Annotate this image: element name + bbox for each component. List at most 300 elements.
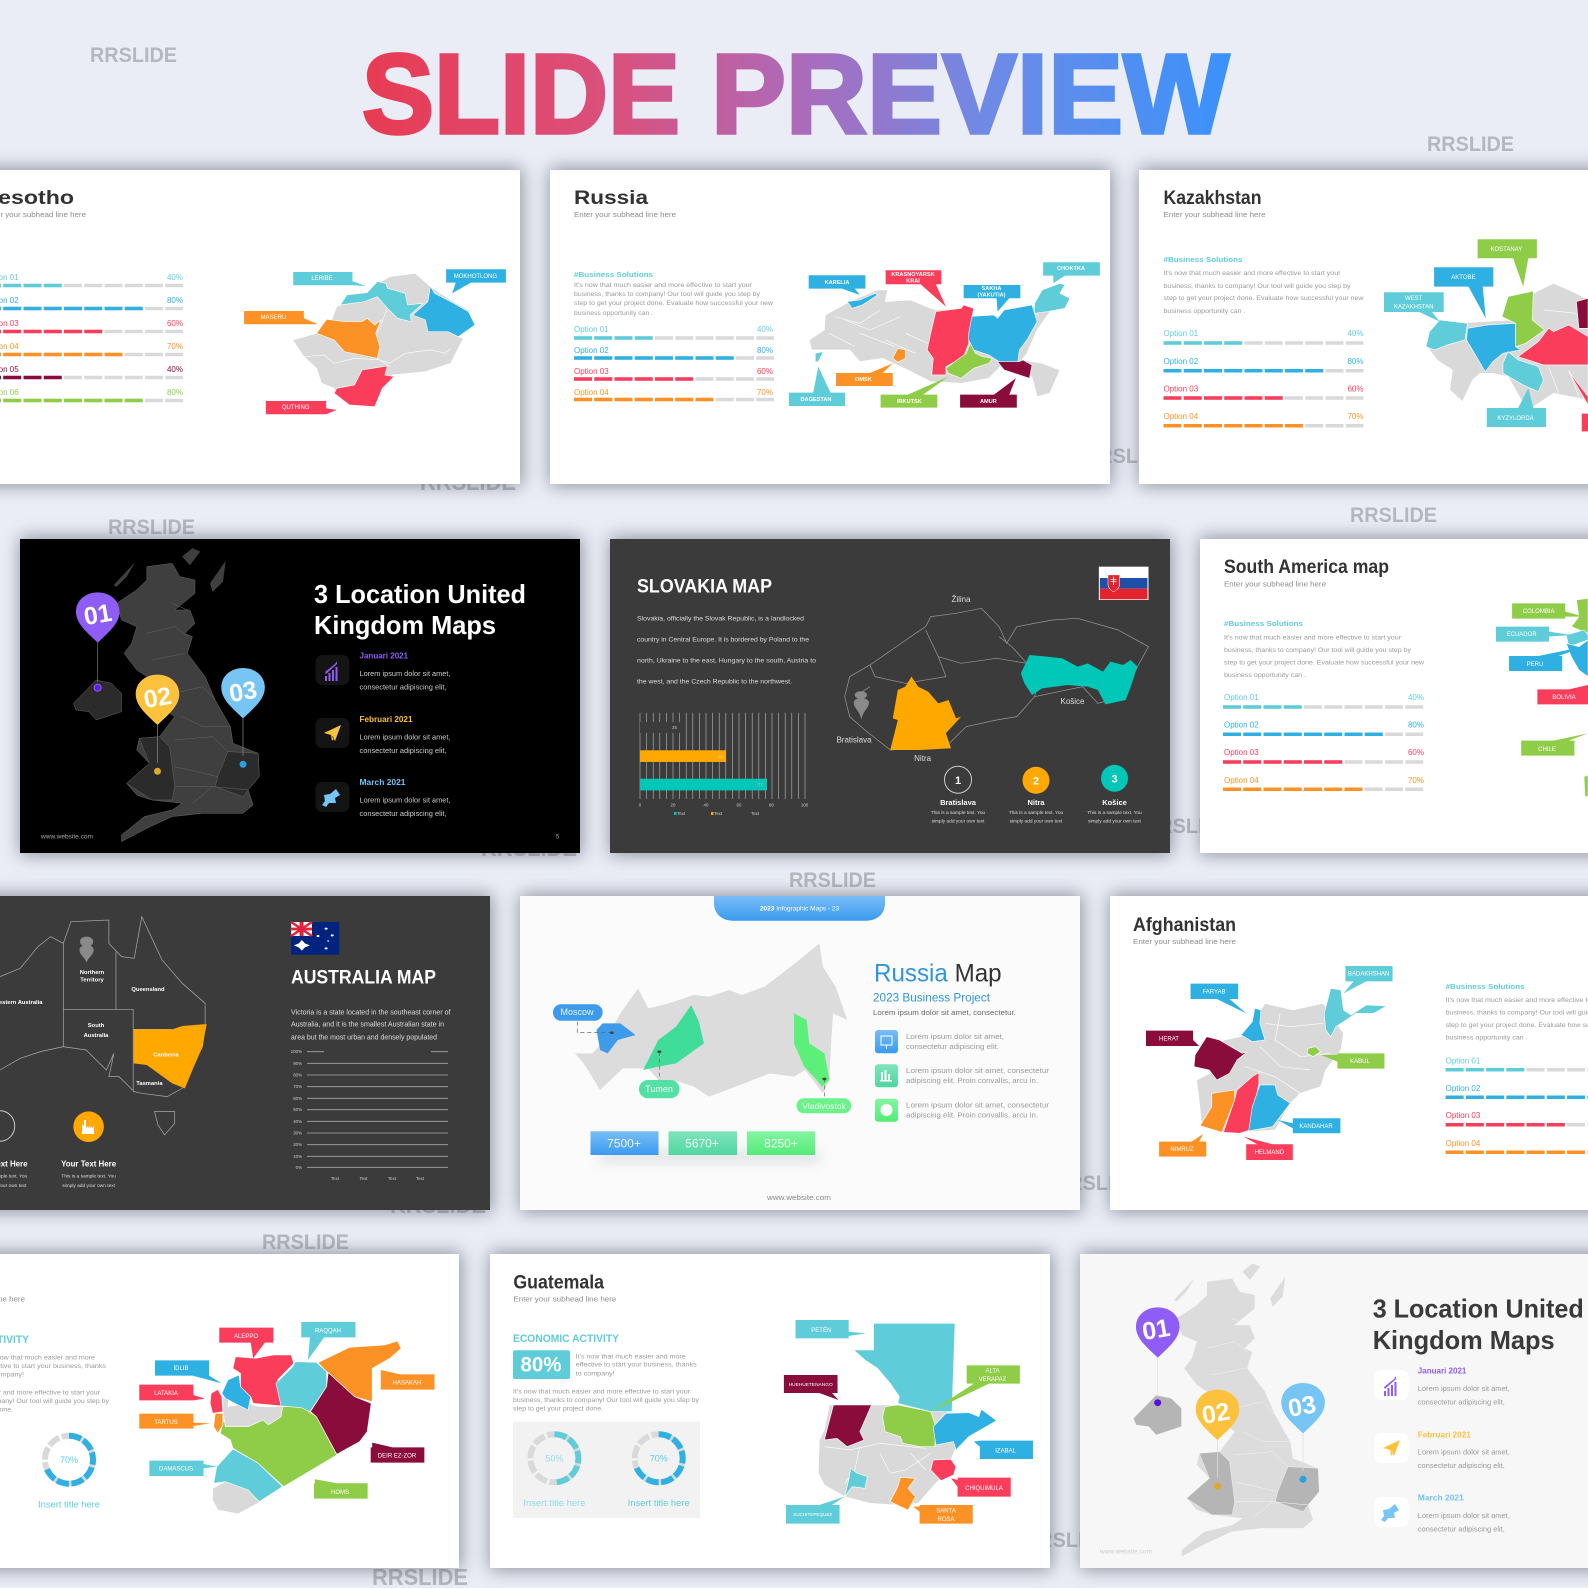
callout: Chiquimula: CHIQUIMULA	[965, 1486, 1003, 1492]
line chart grid: 30%	[293, 1130, 302, 1136]
footer URL: www.website.com	[1099, 1550, 1152, 1556]
callout: Aktobe: AKTOBE	[1451, 275, 1476, 281]
item: presentation: consectetur adipiscing elit.	[906, 1044, 999, 1051]
business solutions text: step to get your project done. Evaluate how successful your new	[574, 300, 773, 307]
business solutions text	[1224, 619, 1424, 679]
heading: Russia: Russia	[574, 188, 649, 209]
item: Februari 2021	[316, 715, 451, 755]
item: Februari 2021: consectetur adipiscing elit,	[1418, 1463, 1505, 1470]
panel: Russia slide	[550, 170, 1110, 484]
label: Vladivostok: Vladivostok	[802, 1101, 846, 1111]
callout: Peru	[1509, 647, 1584, 671]
item: pie: adipiscing elit. Proin convallis, arcu in.	[906, 1112, 1038, 1119]
item: Februari 2021: Lorem ipsum dolor sit amet,	[1418, 1449, 1510, 1456]
item: pie	[875, 1099, 1050, 1122]
progress rows	[574, 325, 774, 400]
region labels: Bratislava	[836, 736, 872, 745]
business solutions text: It's now that much easier and more effective to start your	[1224, 635, 1402, 642]
callout: Dagestan	[789, 367, 845, 406]
description: area but the most urban and densely populated	[291, 1034, 437, 1041]
heading: 3 Location United Kingdom Maps: 3 Location United	[314, 579, 526, 609]
panel: Slovakia slide	[610, 539, 1170, 853]
stat: Košice: Košice	[1102, 798, 1127, 807]
callout: Helmand	[1244, 1137, 1293, 1160]
region labels: Žilina	[951, 595, 971, 604]
text: RRSLIDE	[1144, 815, 1231, 838]
subhead: Enter your subhead line here	[574, 210, 676, 219]
label: Moscow: Moscow	[560, 1007, 594, 1017]
item: chart: Lorem ipsum dolor sit amet, consectetur	[906, 1068, 1050, 1075]
callout: Deir ez-Zor	[371, 1443, 424, 1463]
progress rows: Option 02	[1164, 357, 1199, 366]
callout: Kostanay	[1478, 239, 1537, 287]
state labels: Tasmania	[136, 1081, 163, 1087]
business solutions text: business, thanks to company! Our tool will guide you step by	[1164, 283, 1351, 290]
line chart grid: 100%	[291, 1049, 302, 1054]
progress rows: 40%	[1408, 693, 1424, 702]
bar chart: 40	[704, 803, 709, 808]
callout: Faryab	[1191, 984, 1246, 1013]
business solutions text: It's now that much easier and more effective to start your	[1164, 270, 1341, 277]
callout: Sakha	[964, 285, 1020, 312]
progress rows: Option 04	[1224, 776, 1259, 785]
item: presentation	[875, 1030, 1004, 1053]
stat: orange circle: simply add your own text	[62, 1183, 116, 1189]
description: Australia, and it is the smallest Australian state in	[291, 1022, 444, 1029]
heading: 3 Location United Kingdom Maps: Kingdom Maps	[1373, 1325, 1555, 1355]
callout: Tartus	[139, 1414, 210, 1429]
callout: Raqqah	[301, 1322, 355, 1360]
progress rows: 80%	[167, 388, 183, 397]
stat: Bratislava	[931, 766, 986, 825]
donut panel	[513, 1422, 700, 1518]
stat: Nitra: simply add your own text	[1010, 819, 1063, 825]
progress rows: 70%	[1347, 412, 1364, 421]
flag: Slovakia	[1099, 567, 1148, 600]
stat: Košice: 3	[1111, 774, 1118, 786]
progress rows: 60%	[1347, 384, 1364, 394]
progress rows	[1223, 693, 1424, 789]
progress rows: Option 04	[574, 388, 609, 397]
stat: Nitra: Nitra	[1027, 798, 1045, 807]
callout: Nimruz	[1159, 1134, 1206, 1157]
panel: Russia Map infographic slide	[520, 896, 1080, 1210]
callout: Idlib: IDLIB	[173, 1366, 189, 1372]
callout: Mokhotlong	[446, 269, 506, 293]
callout: Irkutsk	[881, 377, 948, 408]
paragraph text: business, thanks to company! Our tool will guide you step by	[513, 1397, 700, 1404]
progress rows: 40%	[167, 273, 183, 282]
line chart grid: 0%	[296, 1165, 302, 1170]
progress rows: Option 01	[1164, 329, 1199, 338]
heading: South America map: South America map	[1224, 557, 1389, 578]
item: presentation: Lorem ipsum dolor sit amet,	[906, 1034, 1004, 1041]
state labels: South	[88, 1023, 105, 1029]
progress rows: Option 01	[1446, 1056, 1481, 1065]
bar chart: 77	[758, 782, 763, 787]
callout: Leribe: LERIBE	[311, 276, 333, 282]
state labels: Australia	[84, 1033, 109, 1039]
footer URL: www.website.com	[40, 835, 93, 841]
business solutions text: business, thanks to company! Our tool will guide you step by	[574, 291, 761, 298]
label: Vladivostok	[796, 1098, 851, 1113]
description: the west, and the Czech Republic to the northwest.	[637, 678, 792, 685]
callout: Bolivia	[1537, 685, 1588, 704]
text: RRSLIDE	[390, 1192, 486, 1218]
map: Kazakhstan	[1426, 283, 1588, 432]
pin 02	[136, 675, 179, 775]
donut panel: Insert title here	[523, 1498, 585, 1508]
heading: 3 Location United Kingdom Maps: Kingdom Maps	[314, 610, 496, 640]
heading: Afghanistan: Afghanistan	[1133, 915, 1236, 936]
panel: light United Kingdom slide	[1080, 1254, 1588, 1568]
panel: dark United Kingdom slide	[20, 539, 580, 853]
stat: 5670+	[668, 1131, 737, 1155]
line chart grid: Text	[359, 1176, 368, 1181]
progress rows: Option 04	[1446, 1139, 1481, 1148]
callout: Alta Verapaz: VERAPAZ	[979, 1377, 1007, 1383]
callout: Suchitepequez	[786, 1497, 845, 1524]
progress rows: Option 04	[1164, 412, 1199, 421]
callout: Bolivia: BOLIVIA	[1552, 695, 1576, 701]
callout: Maseru	[244, 311, 318, 324]
description: Victoria is a state located in the southeast corner of	[291, 1009, 451, 1016]
callout: Kyzylorda	[1487, 388, 1546, 427]
title	[362, 31, 1229, 157]
map: United Kingdom dark	[73, 548, 259, 842]
callout: Peru: PERU	[1527, 662, 1543, 668]
callout: Krasnoyarsk Krai	[886, 270, 946, 307]
callout: Herat: HERAT	[1159, 1037, 1179, 1043]
stat: orange circle: This is a sample text. You	[61, 1174, 116, 1180]
map: Russia	[809, 283, 1080, 397]
progress rows: Option 02	[1446, 1084, 1481, 1093]
progress rows: 80%	[1408, 720, 1424, 730]
header tab	[714, 896, 885, 921]
stat: Nitra: 2	[1033, 776, 1039, 788]
line chart grid: 70%	[293, 1084, 302, 1089]
callout: Chile: CHILE	[1538, 747, 1556, 753]
subhead: Enter your subhead line here	[1164, 210, 1266, 219]
bar chart: 20	[671, 803, 676, 808]
flag: Australia	[291, 922, 339, 955]
item: chart: adipiscing elit. Proin convallis, arcu in.	[906, 1078, 1038, 1085]
paragraph text: to company!	[576, 1371, 615, 1378]
bar chart: 80	[769, 803, 774, 808]
map: Guatemala	[818, 1323, 997, 1510]
progress rows: Option 01	[574, 325, 609, 334]
panel: Guatemala slide	[490, 1254, 1050, 1568]
description: Slovakia, officially the Slovak Republic, is a landlocked	[637, 616, 804, 623]
callout: Suchitepequez: SUCHITEPEQUEZ	[793, 1512, 832, 1517]
pin 02: 02	[142, 682, 174, 714]
callout: Herat	[1146, 1031, 1199, 1046]
callout: Chiquimula	[951, 1478, 1011, 1497]
header tab: 2023 Infographic Maps - 23	[760, 906, 839, 913]
callout: Faryab: FARYAB	[1202, 990, 1226, 996]
panel: South America slide	[1200, 539, 1588, 853]
bar chart: Text	[751, 811, 760, 816]
callout: Quthing	[266, 401, 337, 414]
callout: Badakhshan	[1343, 966, 1393, 993]
callout: Deir ez-Zor: DEIR EZ-ZOR	[378, 1454, 417, 1460]
bar chart: 100	[801, 803, 809, 808]
item: March 2021	[316, 778, 451, 818]
business solutions text: It's now that much easier and more effective to start your	[574, 282, 753, 289]
callout: Kandahar: KANDAHAR	[1299, 1124, 1333, 1130]
item: Januari 2021: Januari 2021	[1418, 1367, 1467, 1376]
business solutions text: business opportunity can .	[1446, 1035, 1528, 1042]
map: Afghanistan	[1194, 988, 1386, 1133]
watermark: row 2 left: RRSLIDE	[108, 516, 195, 539]
description	[637, 616, 816, 685]
stat: Bratislava: simply add your own text	[932, 819, 985, 825]
bar chart: Text	[714, 811, 723, 816]
subhead: Enter your subhead line here	[513, 1295, 616, 1304]
callout: Santa Rosa: ROSA	[937, 1517, 955, 1523]
progress rows	[0, 273, 183, 400]
callout: Kyzylorda: KYZYLORDA	[1497, 416, 1534, 422]
progress rows: 70%	[1408, 776, 1424, 785]
callout: Ecuador: ECUADOR	[1507, 632, 1537, 638]
callout: Kabul: KABUL	[1350, 1059, 1370, 1065]
business solutions text: step to get your project done. Evaluate how successful your new	[1164, 295, 1364, 302]
business solutions text: #Business Solutions	[1224, 619, 1303, 628]
item: March 2021	[1374, 1494, 1510, 1534]
callout: Petén	[796, 1320, 866, 1338]
progress rows: Option 02	[1224, 720, 1259, 730]
line chart grid: Text	[331, 1176, 340, 1181]
callout: West Kazakhstan: WEST	[1405, 296, 1423, 302]
bar chart	[639, 713, 809, 816]
item: March 2021: consectetur adipiscing elit,	[360, 811, 447, 818]
stat: 7500+	[590, 1131, 658, 1155]
stat: orange circle: Your Text Here	[61, 1160, 117, 1169]
subhead: Enter your subhead line here	[1133, 937, 1236, 946]
pin 03: 03	[227, 676, 259, 708]
item: Januari 2021: Lorem ipsum dolor sit amet,	[360, 671, 451, 678]
panel: Australia slide	[0, 896, 490, 1210]
watermark: row 3 centre: RRSLIDE	[789, 869, 876, 892]
callout: Latakia	[139, 1385, 205, 1400]
panel: Kazakhstan slide	[1139, 170, 1588, 484]
heading: economic activity: ECONOMIC ACTIVITY	[513, 1333, 620, 1345]
progress rows: 80%	[1347, 357, 1364, 366]
paragraph text: It's now that much easier and more effective to start your	[513, 1388, 691, 1395]
callout: Mokhotlong: MOKHOTLONG	[454, 274, 497, 280]
callout: Karelia: KARELIA	[825, 280, 849, 286]
item: Januari 2021: consectetur adipiscing elit,	[360, 685, 447, 692]
donut: 70%	[45, 1436, 93, 1484]
pin 02	[1196, 1390, 1239, 1490]
callout: Aleppo	[219, 1328, 273, 1358]
item: March 2021: Lorem ipsum dolor sit amet,	[360, 798, 451, 805]
callout: Huehuetenango	[784, 1375, 839, 1400]
callout: Idlib	[155, 1360, 222, 1383]
item: Januari 2021: consectetur adipiscing elit,	[1418, 1400, 1505, 1407]
pin 03	[1281, 1383, 1325, 1483]
progress rows: 60%	[757, 367, 773, 376]
map: Russia regions	[575, 943, 847, 1098]
map: United Kingdom light	[1133, 1263, 1319, 1557]
item: Februari 2021	[1374, 1430, 1510, 1470]
map: Syria	[210, 1341, 401, 1514]
callout: Omsk	[836, 363, 893, 386]
map: Slovakia	[845, 608, 1148, 750]
stat: Košice	[1087, 765, 1142, 825]
heading: Australia map: AUSTRALIA MAP	[291, 966, 436, 988]
pin 03: 03	[1286, 1390, 1318, 1423]
stat: left circle	[0, 1111, 28, 1189]
line chart grid	[291, 1049, 448, 1181]
callout: Leribe	[293, 272, 366, 286]
progress rows: 40%	[167, 365, 183, 374]
subheading: 2023 Business Project	[873, 993, 991, 1005]
line chart grid: 10%	[293, 1154, 302, 1159]
stat: orange circle	[61, 1111, 117, 1189]
line chart grid: 40%	[293, 1119, 302, 1124]
callout: Krasnoyarsk Krai: KRAI	[906, 278, 920, 284]
progress rows	[1446, 1056, 1588, 1152]
callout: Choktka	[1043, 262, 1100, 283]
business solutions text: step to get your project done. Evaluate how successful your new	[1224, 660, 1424, 667]
callout: Izabal	[974, 1441, 1033, 1459]
line chart grid: 90%	[293, 1061, 302, 1066]
business solutions text: #Business Solutions	[1446, 982, 1525, 991]
callout: Homs	[314, 1479, 368, 1499]
business solutions text	[1164, 255, 1364, 315]
callout: Alta Verapaz	[931, 1365, 1020, 1412]
heading: 3 Location United Kingdom Maps: 3 Location United	[1373, 1294, 1584, 1324]
callout: Krasnoyarsk Krai: KRASNOYARSK	[891, 272, 935, 278]
business solutions text: business opportunity can .	[1224, 672, 1306, 679]
panel: Lesotho slide	[0, 170, 520, 484]
progress rows: Option 02	[574, 346, 609, 355]
watermark: row 4 left: RRSLIDE	[262, 1231, 349, 1254]
callout: Amur: AMUR	[980, 399, 997, 405]
label: Tumen	[639, 1080, 680, 1098]
intro line: Lorem ipsum dolor sit amet, consectetur.	[873, 1008, 1016, 1017]
progress rows: Option 03	[574, 367, 609, 376]
watermark: row 2 right: RRSLIDE	[1350, 504, 1437, 527]
paragraph text	[0, 1354, 110, 1414]
watermark: top right: RRSLIDE	[1427, 133, 1514, 156]
item: chart	[875, 1064, 1050, 1087]
region labels: Nitra	[914, 754, 932, 763]
callout: Sakha: (YAKUTIA)	[977, 293, 1006, 299]
paragraph text: effective to start your business, thanks	[576, 1362, 697, 1369]
progress rows: 70%	[757, 388, 773, 397]
pin 03	[221, 668, 265, 768]
bar chart: 52	[718, 754, 723, 759]
callout: Hasakah: HASAKAH	[393, 1380, 421, 1386]
stat: 8250+	[747, 1131, 815, 1155]
donut caption: Insert title here	[38, 1500, 100, 1510]
item: Januari 2021: Januari 2021	[360, 652, 409, 661]
text: RRSLIDE	[481, 835, 577, 861]
business solutions text: #Business Solutions	[1164, 255, 1242, 264]
title: PREVIEW	[711, 31, 1229, 157]
donut panel: Insert title here	[628, 1498, 690, 1508]
progress rows: 80%	[757, 346, 773, 355]
item: March 2021: March 2021	[360, 778, 406, 787]
state labels: Queensland	[131, 987, 165, 993]
description: country in Central Europe. It is bordered by Poland to the	[637, 637, 809, 644]
pin 01: 01	[1140, 1314, 1172, 1346]
item: Januari 2021	[1374, 1367, 1510, 1407]
callout: Damascus	[149, 1461, 217, 1476]
bar chart: 60	[737, 803, 742, 808]
item: March 2021: Lorem ipsum dolor sit amet,	[1418, 1513, 1510, 1520]
callout: Tartus: TARTUS	[154, 1420, 178, 1426]
callout: Homs: HOMS	[331, 1490, 349, 1496]
callout: Izabal: IZABAL	[995, 1448, 1017, 1454]
description: north, Ukraine to the east, Hungary to the south, Austria to	[637, 658, 816, 665]
callout: Dagestan: DAGESTAN	[801, 397, 831, 403]
bar chart: Text	[677, 811, 686, 816]
subhead: Enter your subhead line here	[1224, 580, 1326, 589]
progress rows: 40%	[757, 325, 773, 334]
callout: Quthing: QUTHING	[282, 405, 310, 411]
callout: West Kazakhstan	[1384, 292, 1444, 322]
progress rows	[1164, 329, 1364, 426]
callout: Kandahar	[1278, 1118, 1340, 1133]
line chart grid: 50%	[293, 1107, 302, 1112]
stat: 7500+: 7500+	[607, 1136, 641, 1150]
progress rows: 70%	[167, 342, 183, 351]
callout: Amur	[960, 378, 1017, 408]
paragraph text: It's now that much easier and more	[576, 1353, 686, 1360]
heading: 3 Location United Kingdom Maps	[314, 579, 526, 640]
text: RRSLIDE	[1024, 1529, 1111, 1552]
line chart grid: 80%	[293, 1072, 302, 1078]
progress rows: Option 03	[1164, 384, 1199, 394]
pin 01	[76, 592, 120, 691]
stat: Košice: This is a sample text. You	[1087, 810, 1142, 816]
badge: 80%: 80%	[520, 1354, 562, 1376]
line chart grid: 20%	[293, 1142, 302, 1147]
line chart grid: Text	[416, 1176, 425, 1181]
stat: Nitra	[1009, 767, 1064, 825]
callout: Aleppo: ALEPPO	[234, 1334, 258, 1340]
item: Februari 2021: consectetur adipiscing elit,	[360, 748, 447, 755]
callout: Aktobe	[1434, 267, 1493, 318]
donut panel: 50%	[545, 1454, 563, 1464]
callout: Santa Rosa: SANTA	[936, 1508, 956, 1514]
callout: Omsk: OMSK	[855, 377, 872, 383]
paragraph text	[513, 1353, 700, 1413]
callout: Helmand: HELMAND	[1255, 1150, 1285, 1156]
map: South America	[1566, 598, 1588, 797]
callout: Kostanay: KOSTANAY	[1491, 247, 1522, 253]
bar chart: 0	[639, 803, 642, 808]
progress rows: Option 01	[1224, 693, 1259, 702]
region labels: Košice	[1060, 697, 1085, 706]
callout: Choktka: CHOKTKA	[1057, 266, 1085, 272]
pin 01: 01	[82, 599, 114, 631]
business solutions text: business, thanks to company! Our tool will guide you step by	[1224, 647, 1412, 654]
item: Februari 2021: Lorem ipsum dolor sit amet,	[360, 734, 451, 741]
heading: Guatemala: Guatemala	[513, 1272, 604, 1293]
state labels: Northern	[80, 970, 105, 976]
panel: Afghanistan slide	[1110, 896, 1588, 1210]
label: Tumen: Tumen	[645, 1084, 673, 1094]
state labels: Territory	[80, 978, 104, 984]
stat: 5670+: 5670+	[685, 1136, 719, 1150]
label: Moscow	[553, 1004, 603, 1021]
item: Februari 2021: Februari 2021	[1418, 1430, 1471, 1439]
progress rows: Option 03	[1224, 748, 1259, 757]
